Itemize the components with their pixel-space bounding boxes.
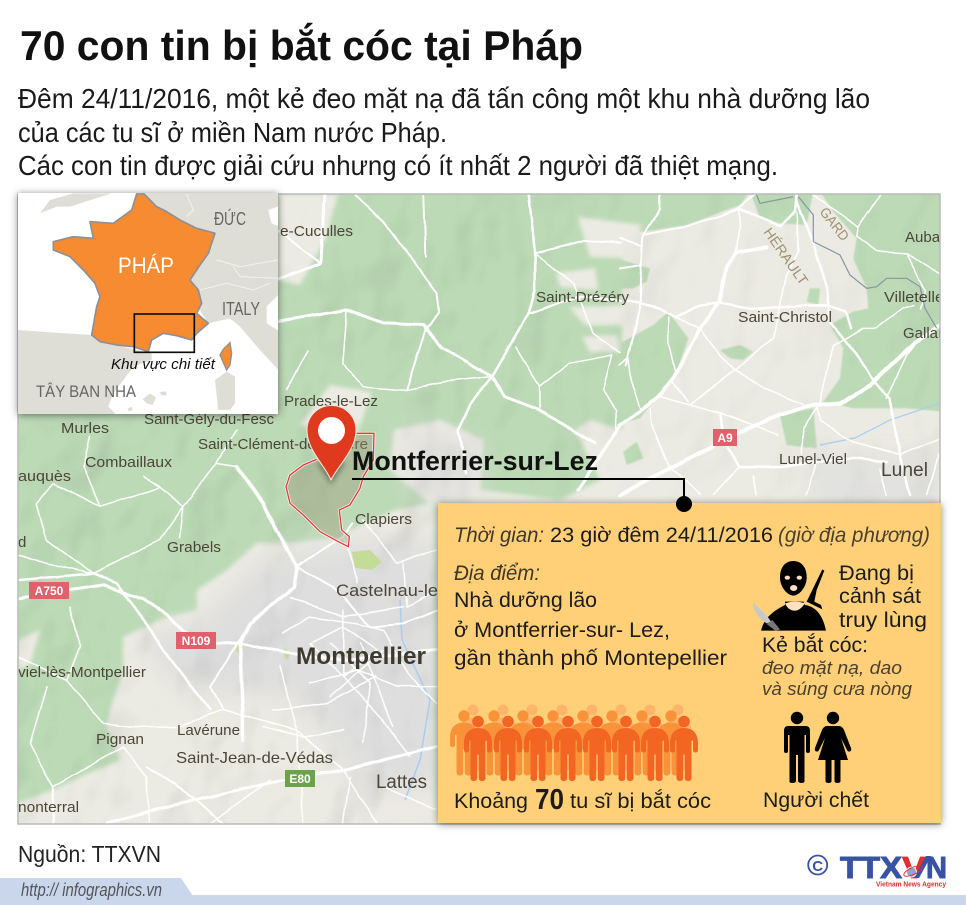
place names: Grabels: [167, 539, 221, 556]
hostage count: [454, 784, 711, 816]
place names: Gallar: [903, 325, 943, 342]
place names: Saint-Jean-de-Védas: [176, 750, 333, 767]
highway shields: [29, 429, 737, 787]
place names: Lunel-Viel: [779, 451, 847, 468]
place names: Saint-Drézéry: [536, 289, 629, 306]
place names: Murles: [61, 420, 109, 437]
logo: TTXVN: TTX: [840, 850, 902, 885]
icon: man and woman: [784, 712, 851, 783]
logo: TTXVN: C: [812, 858, 823, 875]
place: [454, 562, 727, 670]
inset labels: TÂY BAN NHA: [36, 382, 137, 401]
icon: group of 70 hostages: [450, 704, 698, 781]
info panel: [438, 503, 941, 823]
parks and water: [236, 403, 940, 800]
place names: auquès: [18, 468, 71, 485]
inset map: France: [17, 193, 280, 417]
inset labels: [36, 208, 260, 401]
source: Nguồn: TTXVN: [18, 841, 161, 867]
place names: HÉRAULT: [761, 225, 812, 288]
kidnapper description: và súng cưa nòng: [762, 679, 912, 699]
time: 23 giờ đêm 24/11/2016: [550, 524, 773, 547]
place names: [18, 204, 944, 816]
time: Thời gian:: [454, 524, 544, 547]
footer band: [0, 878, 966, 905]
inset labels: Khu vực chi tiết: [111, 356, 216, 373]
place names: Lunel: [881, 460, 928, 481]
place names: Pignan: [96, 731, 144, 748]
leader line: [352, 479, 692, 512]
terrain: hill shading: [19, 225, 653, 823]
place names: viel-lès-Montpellier: [18, 664, 146, 681]
place: Nhà dưỡng lão: [454, 589, 597, 612]
inset labels: ITALY: [222, 299, 260, 319]
river: Vidourle: [757, 195, 937, 328]
hostage count: tu sĩ bị bắt cóc: [570, 790, 711, 813]
place names: Villetelle: [884, 289, 944, 306]
map: Montpellier region: [10, 190, 944, 824]
highway shields: E80: [289, 772, 311, 786]
place names: Saint-Gély-du-Fesc: [144, 411, 274, 428]
intro text: Đêm 24/11/2016, một kẻ đeo mặt nạ đã tấn công một khu nhà dưỡng lão: [18, 83, 870, 114]
intro text: của các tu sĩ ở miền Nam nước Pháp.: [18, 117, 447, 148]
hostage count: 70: [535, 784, 564, 816]
place names: d: [18, 534, 26, 551]
wanted status: cảnh sát: [839, 585, 921, 608]
time: [454, 524, 930, 547]
place names: Clapiers: [355, 511, 412, 528]
map border: [18, 194, 940, 824]
place names: Prades-le-Lez: [284, 393, 378, 410]
wanted status: [839, 562, 927, 632]
place names: e-Cuculles: [280, 223, 353, 240]
shields and labels of the map: [18, 204, 944, 816]
Corsica: [220, 343, 232, 370]
place: Địa điểm:: [454, 562, 540, 585]
intro text: [18, 83, 870, 181]
place names: Saint-Christol: [738, 309, 832, 326]
terrain: green areas west: [10, 190, 622, 806]
highway shields: A750: [35, 584, 64, 598]
logo: TTXVN: N: [926, 850, 947, 885]
kidnapper description: đeo mặt nạ, dao: [762, 658, 902, 678]
wanted status: Đang bị: [839, 562, 914, 585]
deaths label: Người chết: [763, 789, 869, 812]
detail box: [134, 314, 194, 352]
place names: Castelnau-le: [336, 581, 438, 600]
hostage count: Khoảng: [454, 790, 528, 813]
intro text: Các con tin được giải cứu nhưng có ít nhất 2 người đã thiệt mạng.: [18, 150, 778, 181]
place names: Auba: [905, 229, 941, 246]
inset labels: ĐỨC: [214, 208, 246, 229]
logo: TTXVN: Vietnam News Agency: [876, 880, 947, 888]
place names: Montpellier: [296, 643, 426, 670]
title: 70 con tin bị bắt cóc tại Pháp: [20, 21, 583, 69]
icon: map pin: [307, 406, 356, 484]
place names: Combaillaux: [85, 454, 173, 471]
France shape: [53, 194, 215, 352]
kidnapper description: Kẻ bắt cóc:: [762, 634, 868, 657]
inset labels: PHÁP: [118, 253, 174, 278]
roads: [18, 190, 942, 823]
highway shields: A9: [717, 431, 733, 445]
time: (giờ địa phương): [778, 524, 930, 547]
place names: Lavérune: [177, 722, 240, 739]
logo: TTXVN: [808, 850, 947, 888]
place: ở Montferrier-sur- Lez,: [454, 619, 670, 642]
highway shields: N109: [182, 634, 211, 648]
place names: GARD: [817, 204, 853, 244]
terrain: beige patches: [18, 194, 642, 670]
terrain: urban area: [140, 425, 940, 790]
commune boundary: Montferrier-sur-Lez: [286, 433, 374, 547]
logo: TTXVN: V: [902, 850, 926, 885]
wanted status: truy lùng: [839, 609, 927, 632]
footer band: http:// infographics.vn: [21, 880, 162, 900]
kidnapper description: [762, 634, 912, 699]
neighbouring land: [17, 193, 280, 417]
terrain: green areas east: [617, 192, 943, 465]
place names: Lattes: [376, 772, 427, 793]
icon: masked kidnapper: [753, 561, 826, 631]
place names: Saint-Clément-de-Rivière: [198, 436, 368, 453]
place: gần thành phố Montepellier: [454, 647, 727, 670]
place names: nonterral: [18, 799, 79, 816]
location label: Montferrier-sur-Lez: Montferrier-sur-Lez: [352, 446, 598, 476]
